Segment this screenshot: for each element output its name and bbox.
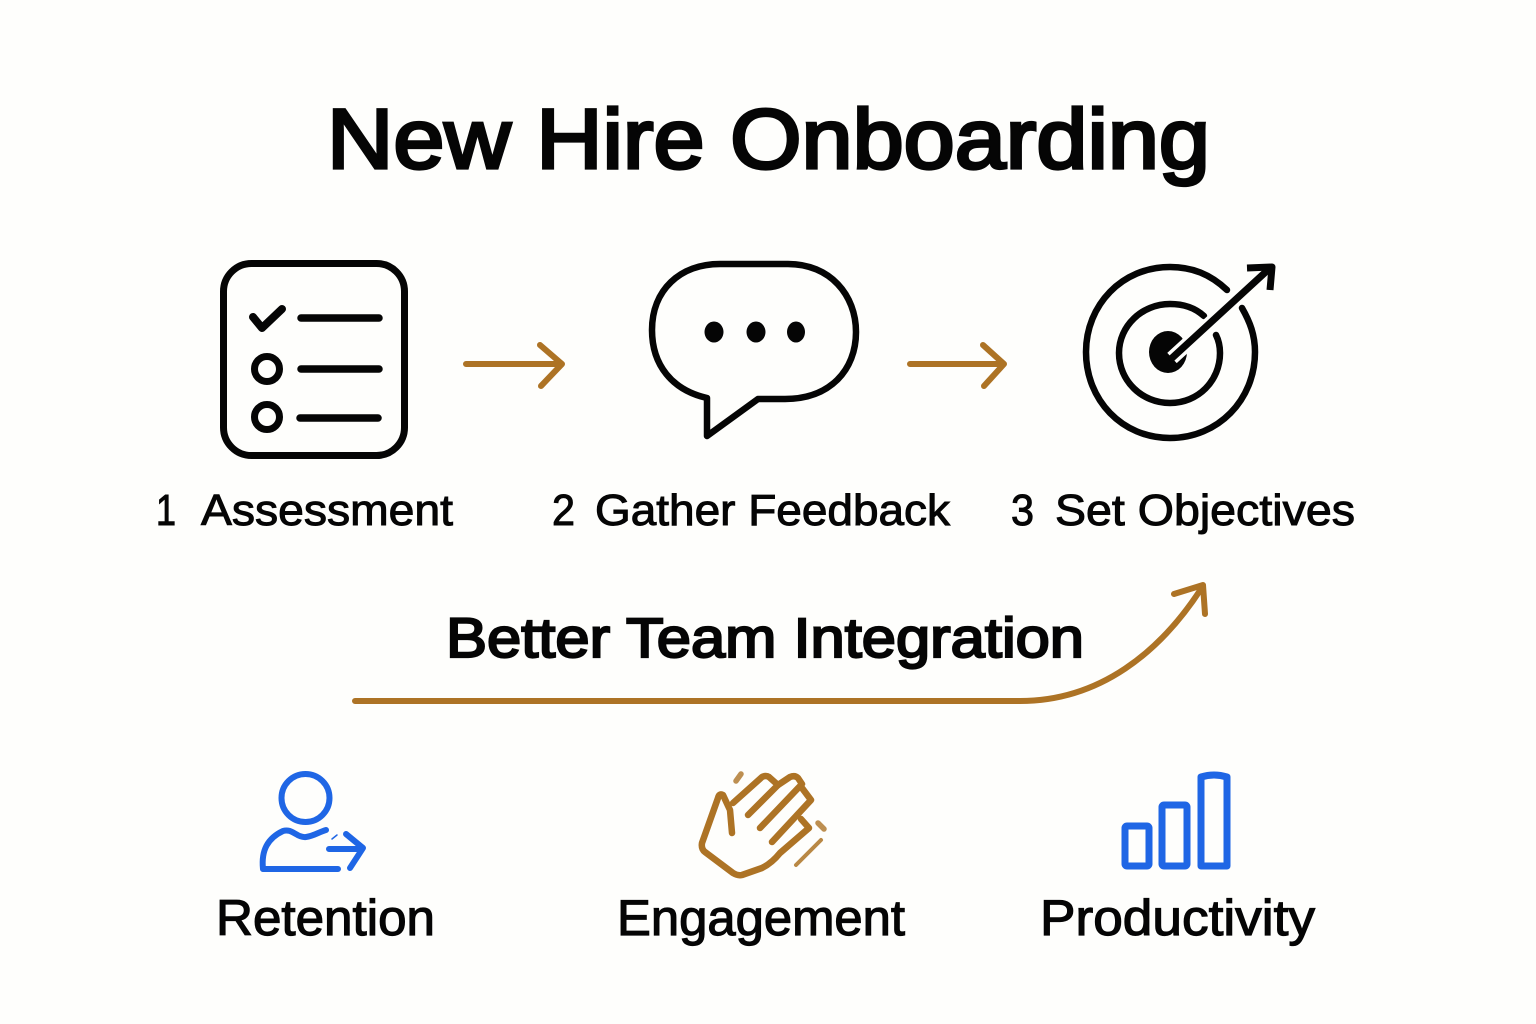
arrow: step 1 to step 2: [466, 345, 562, 386]
icon: productivity bars: [1125, 775, 1227, 866]
icon: checklist: [224, 264, 404, 456]
label: retention: Retention: [216, 890, 435, 946]
label: engagement: Engagement: [617, 890, 905, 946]
icon: retention person: [263, 774, 363, 869]
step 3 label: 3: [1011, 486, 1034, 535]
label: productivity: Productivity: [1040, 890, 1315, 946]
title: New Hire Onboarding: [327, 92, 1210, 186]
step 2 label: Gather Feedback: [595, 486, 951, 535]
arrow: rising curve: [355, 585, 1205, 701]
icon: target with arrow: [1086, 267, 1272, 438]
step 3 label: Set Objectives: [1055, 486, 1355, 535]
arrow: step 2 to step 3: [910, 345, 1004, 386]
step 2 label: 2: [552, 486, 575, 535]
step 1 label: 1: [156, 486, 176, 535]
subheading: better team integration: Better Team Integration: [446, 606, 1084, 669]
icon: engagement hands: [702, 774, 824, 875]
icon: speech bubble: [652, 264, 856, 436]
step 1 label: Assessment: [201, 486, 453, 535]
